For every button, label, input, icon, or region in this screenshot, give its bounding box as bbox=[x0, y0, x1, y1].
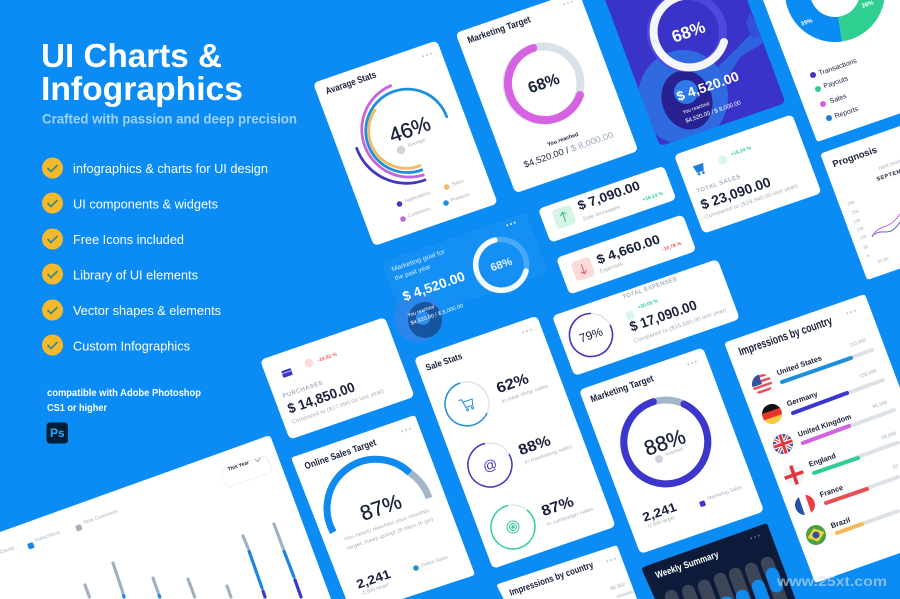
legend: Online Sales bbox=[420, 554, 449, 569]
caption: Expenses bbox=[599, 261, 624, 275]
dropdown: this year bbox=[220, 455, 273, 488]
icon: credit card bbox=[281, 368, 293, 378]
panel: prognosis bbox=[821, 126, 900, 279]
checklist item 6: Custom Infographics bbox=[73, 338, 190, 354]
icon: at sign: @ bbox=[480, 455, 500, 475]
axis labels: 30k bbox=[847, 199, 856, 207]
checklist item 6 bbox=[42, 334, 190, 356]
row: united states bbox=[749, 337, 872, 397]
checklist item 5 bbox=[42, 300, 221, 320]
row: germany: Germany bbox=[785, 389, 820, 408]
menu dots bbox=[846, 310, 856, 314]
average caption bbox=[397, 137, 427, 154]
legend: Reports bbox=[834, 106, 860, 120]
progress track bbox=[618, 592, 632, 596]
label: PURCHASES bbox=[282, 381, 324, 400]
caption: in total shop sales bbox=[501, 383, 550, 405]
change bbox=[718, 145, 753, 164]
compatibility note: CS1 or higher bbox=[47, 403, 107, 414]
decorative swirl bbox=[638, 12, 763, 144]
description: You nearly reached your monthly bbox=[343, 508, 431, 543]
menu dots bbox=[563, 1, 573, 5]
feature checklist bbox=[42, 158, 268, 356]
subtitle: Crafted with passion and deep precision bbox=[42, 112, 297, 126]
row: united states: 110,002 bbox=[849, 337, 868, 349]
checklist item 2 bbox=[42, 192, 218, 214]
panel: online sales target bbox=[292, 416, 474, 599]
axis labels bbox=[847, 199, 890, 264]
comparison: Compared to ($15,680.00 last year) bbox=[633, 307, 728, 345]
legend: Payouts bbox=[823, 75, 850, 90]
caption amount: $4,520.00 / $ 8,000.00 bbox=[410, 303, 464, 327]
icon: target bbox=[507, 521, 519, 533]
donut chart bbox=[624, 400, 708, 484]
row: united kingdom bbox=[770, 400, 894, 457]
heading: Prognosis bbox=[831, 145, 879, 170]
caption: You reached bbox=[407, 304, 436, 319]
amount: $ 23,090.00 bbox=[698, 174, 773, 212]
heading bbox=[391, 248, 447, 282]
change: +16.24 % bbox=[642, 191, 665, 203]
title bbox=[41, 38, 243, 108]
axis labels: 01.05 bbox=[877, 256, 890, 264]
row: france: France bbox=[818, 483, 844, 499]
menu dots bbox=[522, 329, 532, 333]
label 26%: 26% bbox=[861, 0, 875, 10]
menu dots bbox=[506, 222, 516, 226]
row: brazil: Brazil bbox=[829, 515, 851, 530]
legend bbox=[810, 58, 860, 121]
value 87%: 87% bbox=[357, 490, 405, 526]
label: TOTAL EXPENSES bbox=[622, 277, 678, 301]
title: UI Charts & bbox=[41, 38, 222, 75]
legend: Sales bbox=[451, 178, 465, 188]
watermark: www.25xt.com bbox=[776, 573, 887, 589]
menu dots bbox=[606, 558, 616, 562]
caption amount: $4,520.00 / $ 8,000.00 bbox=[685, 100, 742, 125]
description: target. Keep going! (8 days to go) bbox=[346, 516, 434, 552]
label 39%: 39% bbox=[800, 18, 814, 28]
comparison: Compared to ($19,340.00 last year) bbox=[704, 183, 799, 221]
amount: $ 4,520.00 bbox=[674, 69, 741, 104]
heading: Marketing Target bbox=[466, 14, 533, 46]
donut chart bbox=[506, 46, 580, 120]
checklist item 4: Library of UI elements bbox=[73, 268, 198, 282]
row: brazil bbox=[803, 511, 898, 548]
legend: Products bbox=[450, 192, 471, 204]
checklist item 2: UI components & widgets bbox=[73, 196, 218, 212]
menu dots bbox=[687, 361, 697, 365]
row: england bbox=[781, 431, 898, 488]
row: germany bbox=[759, 368, 883, 427]
amount: $ 4,520.00 bbox=[400, 269, 467, 304]
axis labels: 0 bbox=[866, 253, 871, 259]
count: 2,241 bbox=[355, 567, 393, 592]
reached amount: $4,520.00 / $ 8,000.00 bbox=[522, 130, 615, 170]
row: united kingdom: United Kingdom bbox=[796, 412, 853, 439]
legend: Transactions bbox=[818, 58, 858, 77]
checklist item 3: Free Icons included bbox=[73, 232, 184, 247]
heading: Impressions by country bbox=[508, 560, 596, 599]
ring: shop bbox=[445, 382, 489, 426]
dropdown: this year: This Year bbox=[227, 460, 250, 473]
value 79%: 79% bbox=[577, 324, 605, 345]
value 62%: 62% bbox=[494, 370, 531, 397]
axis labels: 20k bbox=[853, 217, 862, 225]
legend: new customers bbox=[75, 508, 119, 532]
panel: big bar chart bbox=[0, 436, 331, 599]
checklist item 1 bbox=[42, 158, 268, 178]
checklist item 1: infographics & charts for UI design bbox=[73, 161, 268, 176]
panel: marketing target top bbox=[456, 0, 638, 193]
icon: cart bbox=[694, 164, 705, 175]
change: -10.78 % bbox=[661, 241, 683, 253]
amount: $ 17,090.00 bbox=[627, 297, 699, 334]
amount: $ 4,660.00 bbox=[594, 231, 662, 267]
heading: Weekly Summary bbox=[654, 549, 721, 581]
change: +20.09 % bbox=[637, 298, 660, 311]
comparison: Compared to ($17,990.00 last year) bbox=[291, 389, 385, 426]
change: -10.82 % bbox=[317, 351, 338, 364]
axis labels: 25k bbox=[851, 208, 860, 216]
panel: purple goal card bbox=[600, 0, 786, 146]
value 88%: 88% bbox=[516, 432, 553, 459]
value 68%: 68% bbox=[526, 71, 562, 97]
panel: marketing target lower bbox=[579, 347, 764, 554]
heading: Avarage Stats bbox=[324, 70, 378, 97]
donut chart bbox=[797, 0, 872, 29]
ring: marketing bbox=[468, 443, 512, 487]
compatibility note bbox=[47, 388, 201, 414]
panel: impressions by country bbox=[725, 295, 900, 582]
axis labels: 5k bbox=[863, 244, 870, 250]
legend: Sales bbox=[829, 93, 848, 105]
caption: You reached bbox=[682, 101, 711, 116]
heading: Sale Stats bbox=[424, 351, 464, 373]
panel: sale stats bbox=[414, 316, 616, 569]
legend bbox=[699, 484, 743, 507]
checklist item 4 bbox=[42, 264, 198, 284]
legend bbox=[397, 178, 471, 222]
value: 90,002 bbox=[610, 582, 626, 592]
row: england: England bbox=[807, 451, 837, 469]
ring chart bbox=[476, 240, 526, 290]
heading: Impressions by country bbox=[737, 313, 834, 359]
icon: up arrow bbox=[551, 204, 577, 230]
count: 2,241 bbox=[641, 500, 679, 525]
checklist item 3 bbox=[42, 228, 184, 250]
ring chart bbox=[569, 313, 612, 356]
label: TOTAL SALES bbox=[696, 174, 742, 195]
amount: $ 14,850.00 bbox=[285, 379, 357, 416]
value 87%: 87% bbox=[539, 493, 576, 520]
legend: subscribers: Subscribers bbox=[34, 529, 61, 544]
heading: Online Sales Target bbox=[303, 437, 379, 472]
legend: subscribers bbox=[27, 529, 61, 550]
title: Infographics bbox=[41, 71, 243, 108]
reached caption: You reached bbox=[547, 132, 579, 148]
description bbox=[343, 508, 434, 552]
legend: Customers bbox=[407, 206, 432, 220]
axis labels: 10k bbox=[859, 233, 868, 241]
row: france: 82 bbox=[892, 463, 899, 471]
amount: $ 7,090.00 bbox=[575, 178, 642, 213]
icon: photoshop: Ps bbox=[50, 426, 65, 440]
arc chart bbox=[357, 86, 447, 183]
panel: average stats bbox=[313, 40, 498, 246]
row: united states: United States bbox=[775, 353, 823, 377]
panel: transactions donut bbox=[763, 0, 900, 141]
target caption: /2,800 target bbox=[647, 515, 676, 530]
menu dots bbox=[750, 535, 760, 539]
value 46%: 46% bbox=[386, 112, 434, 148]
panel: weekly summary bbox=[642, 524, 795, 599]
panel: purchases bbox=[260, 317, 415, 440]
panel: impressions by country lower bbox=[497, 546, 637, 599]
change bbox=[625, 298, 660, 320]
panel: marketing goal blue card bbox=[380, 212, 550, 342]
icon: photoshop bbox=[46, 422, 68, 444]
caption: in campaign sales bbox=[546, 506, 595, 528]
caption: in marketing sales bbox=[524, 444, 574, 466]
compatibility note: compatible with Adobe Photoshop bbox=[47, 388, 201, 399]
decorative swirl bbox=[394, 294, 442, 342]
caption: Sale increases bbox=[582, 204, 621, 223]
panel: total sales bbox=[674, 114, 822, 234]
line chart bbox=[872, 214, 900, 237]
gauge bbox=[327, 459, 429, 532]
icon: cart bbox=[458, 396, 475, 412]
legend: Marketing Sales bbox=[707, 484, 743, 502]
ring chart bbox=[651, 0, 724, 68]
panel: sale increases bbox=[538, 166, 676, 243]
change bbox=[305, 351, 338, 367]
row: germany: 103,499 bbox=[858, 368, 878, 380]
legend: new customers: New Customers bbox=[83, 508, 119, 526]
panel: total expenses bbox=[552, 259, 740, 376]
menu dots bbox=[422, 53, 432, 57]
icon: down arrow bbox=[570, 256, 596, 282]
row: france bbox=[792, 463, 899, 518]
value 68%: 68% bbox=[669, 18, 708, 46]
bar chart bbox=[665, 557, 788, 599]
change: +16.24 % bbox=[730, 145, 753, 158]
panel: expenses bbox=[556, 214, 696, 295]
ring: campaign bbox=[491, 505, 535, 549]
reached caption bbox=[655, 446, 684, 463]
row: england: 89,000 bbox=[881, 431, 897, 441]
value 88%: 88% bbox=[641, 425, 689, 461]
axis labels: 15k bbox=[856, 225, 865, 233]
stacked bars bbox=[85, 524, 301, 597]
average caption: Average bbox=[407, 137, 427, 149]
heading: Marketing Target bbox=[589, 373, 656, 405]
heading: the past year bbox=[394, 263, 433, 282]
heading: Marketing goal for bbox=[391, 248, 447, 273]
row: united kingdom: 96,998 bbox=[872, 400, 888, 410]
value 68%: 68% bbox=[489, 256, 514, 274]
checklist item 5: Vector shapes & elements bbox=[73, 303, 221, 318]
menu dots bbox=[401, 428, 411, 432]
legend: Applications bbox=[404, 190, 432, 205]
reached caption: reached bbox=[665, 446, 684, 458]
target caption: /2,800 target bbox=[361, 582, 390, 597]
